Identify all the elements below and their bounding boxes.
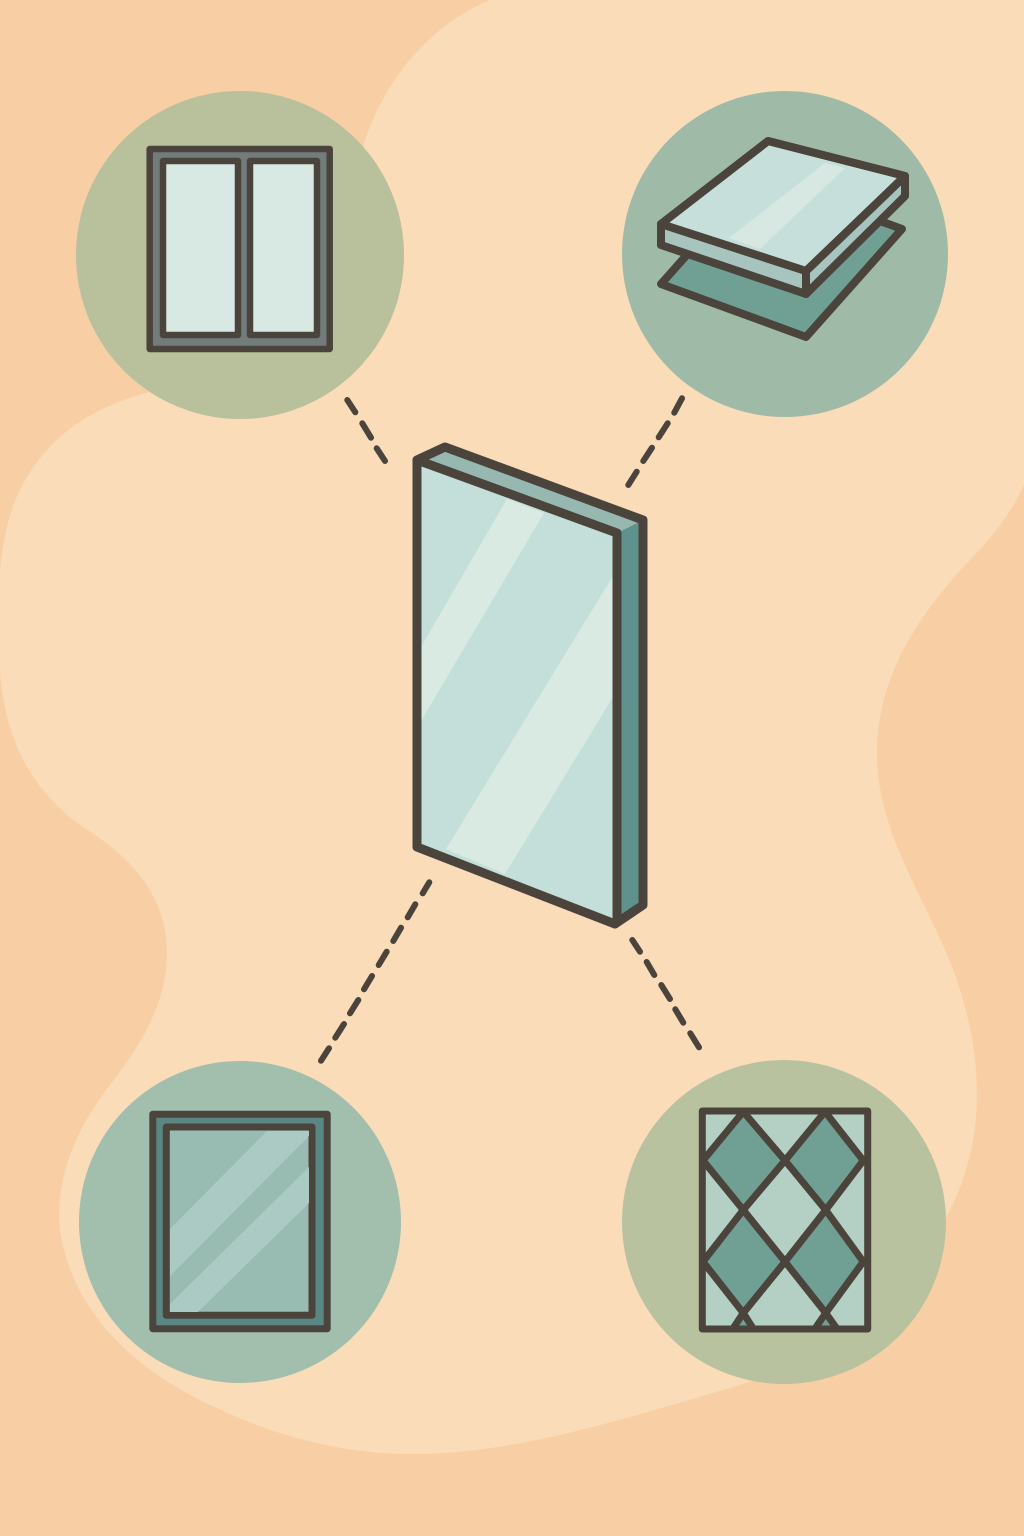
icon: framed glass pane xyxy=(153,1114,327,1329)
connector: bottom left xyxy=(321,882,429,1061)
panel: top left circle xyxy=(76,91,404,419)
icon: laminated glass layers xyxy=(661,141,905,337)
icon: leaded diamond lattice window xyxy=(702,1111,868,1333)
connector: top left xyxy=(347,400,385,461)
icon: double casement window xyxy=(150,149,330,349)
panel: bottom left circle xyxy=(79,1061,401,1383)
panel: top right circle xyxy=(622,91,948,417)
icon: central glass pane xyxy=(417,447,643,924)
panel: bottom right circle xyxy=(622,1060,946,1384)
connector: bottom right xyxy=(632,940,699,1047)
connector: top right xyxy=(628,398,682,485)
